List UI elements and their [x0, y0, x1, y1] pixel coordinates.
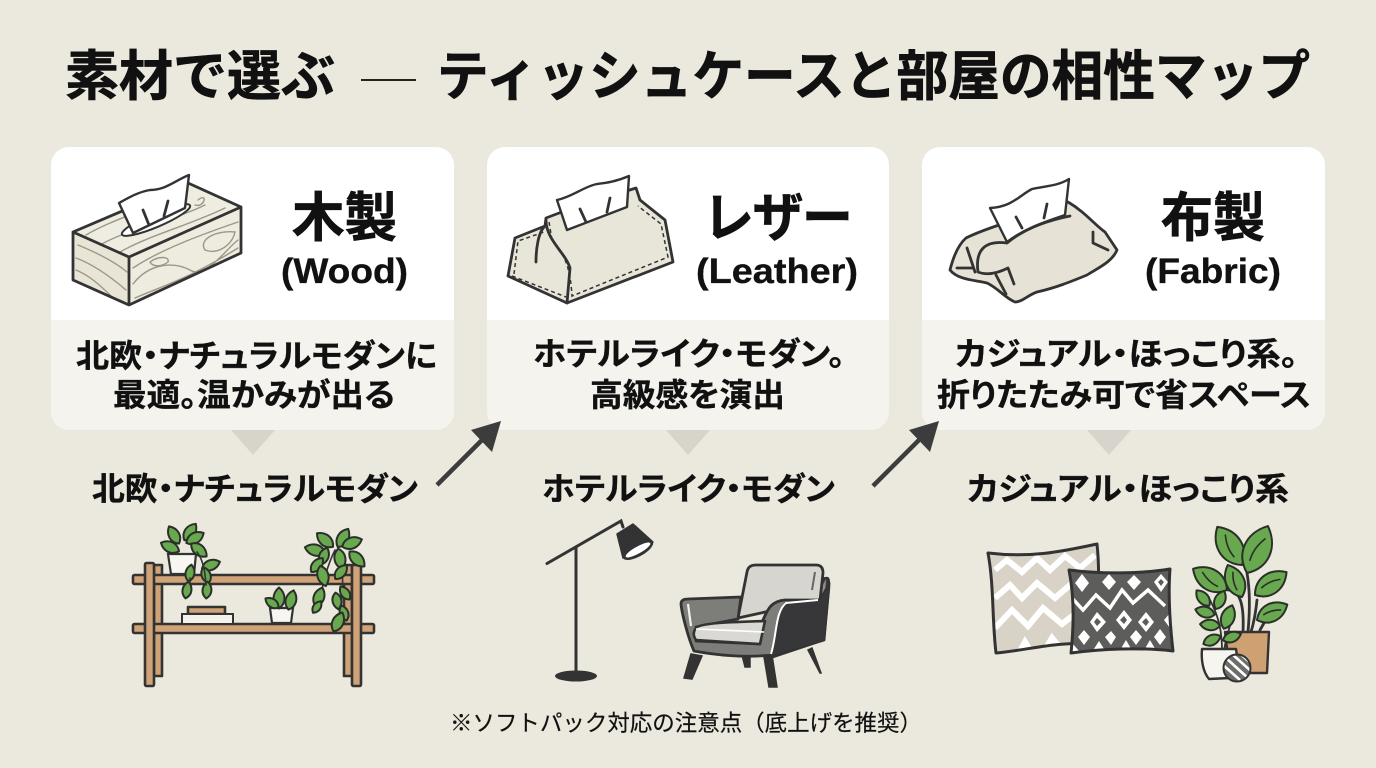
cushion: beige chevron — [988, 544, 1100, 655]
text block: leather description: 高級感を演出 — [590, 377, 785, 413]
icon: wooden tissue box — [73, 175, 241, 305]
illustration: floor lamp — [547, 521, 656, 682]
style label: casual cozy: カジュアル・ほっこり系 — [967, 471, 1289, 507]
arrow: leather to fabric — [873, 421, 939, 486]
text block: fabric description: 折りたたみ可で省スペース — [937, 377, 1311, 413]
text block: wood description: 最適。温かみが出る — [113, 377, 395, 413]
heading: fabric: 布製 — [1161, 189, 1265, 248]
subheading: wood: (Wood) — [281, 252, 408, 291]
cushion: grey diamonds — [1069, 569, 1176, 653]
title — [65, 47, 1310, 107]
illustration: armchair — [681, 565, 829, 687]
subheading: leather: (Leather) — [696, 252, 858, 291]
illustration: wooden shelf with plants — [133, 521, 374, 686]
icon: fabric tissue case — [950, 179, 1117, 302]
subheading: fabric: (Fabric) — [1145, 252, 1281, 291]
illustration: cushions — [988, 544, 1176, 655]
text block: wood description — [76, 338, 437, 413]
heading: wood: 木製 — [292, 189, 397, 248]
text block: leather description — [533, 336, 845, 413]
illustration: potted plants — [1192, 525, 1288, 682]
text block: fabric description: カジュアル・ほっこり系。 — [955, 336, 1298, 372]
arrow: wood to leather — [437, 421, 501, 485]
plant: left pot — [159, 521, 222, 599]
plant: centre pot — [263, 588, 299, 623]
pointer triangles — [231, 430, 1131, 455]
text block: fabric description — [937, 336, 1311, 413]
icon: leather tissue case — [508, 176, 673, 303]
title: ティッシュケースと部屋の相性マップ — [437, 47, 1310, 107]
plant: hanging vine — [303, 526, 368, 634]
style label: hotel-like modern: ホテルライク・モダン — [542, 471, 835, 507]
heading: leather: レザー — [705, 189, 852, 248]
panel: leather card — [487, 147, 889, 430]
text block: wood description: 北欧・ナチュラルモダンに — [76, 338, 437, 374]
panel: fabric card — [922, 147, 1325, 430]
style label: nordic natural modern: 北欧・ナチュラルモダン — [92, 471, 418, 507]
panel: wood card — [51, 147, 454, 430]
text block: leather description: ホテルライク・モダン。 — [533, 336, 845, 372]
title: 素材で選ぶ — [65, 47, 335, 107]
footnote: ※ソフトパック対応の注意点（底上げを推奨） — [450, 711, 922, 736]
books — [182, 607, 233, 624]
